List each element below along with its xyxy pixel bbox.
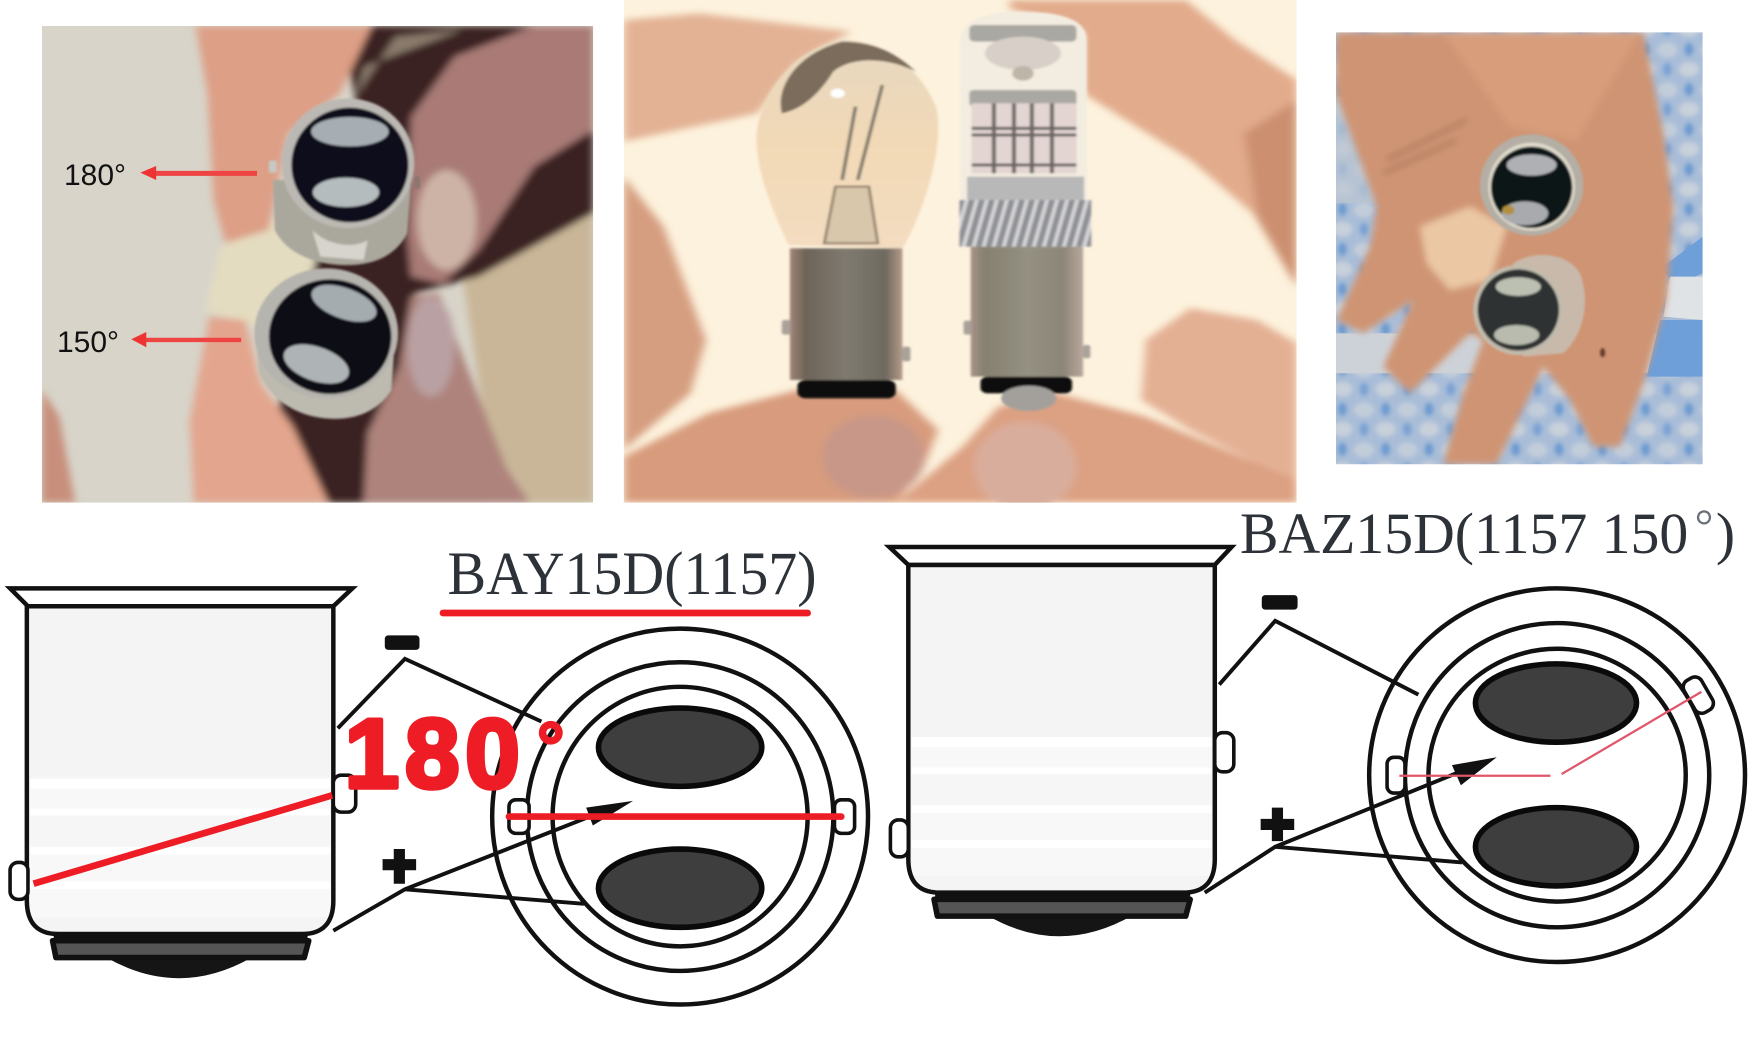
thin red angle lines	[1399, 692, 1701, 776]
diagram: BAY15D 180 degree base	[10, 540, 868, 1005]
red heading underline	[443, 610, 808, 616]
panel: photo comparing 180 and 150 degree bases	[42, 26, 593, 503]
plus symbol and leader lines	[1205, 757, 1497, 893]
heading: BAZ15D(1157 150°): )	[1716, 503, 1735, 566]
minus symbol and leader lines	[338, 635, 541, 728]
bulb side view	[10, 588, 356, 978]
LED bulb	[960, 12, 1091, 411]
panel: photo of incandescent and LED bulbs held in fingers	[624, 0, 1297, 512]
arrow: 180 degree pin	[140, 166, 257, 180]
label: 150 degrees: 150°	[57, 326, 119, 359]
contact end view	[492, 629, 868, 1005]
minus symbol and leader lines	[1219, 595, 1418, 695]
diagram: BAZ15D 150 degree base	[889, 500, 1745, 962]
heading: BAZ15D(1157 150°): °	[1695, 500, 1713, 552]
callout: 180 degrees: °	[537, 708, 570, 786]
heading: BAZ15D(1157 150°): BAZ15D(1157 150	[1240, 503, 1688, 566]
panel: photo of two bulb bases held in a hand	[1330, 27, 1710, 470]
label: 180 degrees: 180°	[64, 159, 126, 192]
red pin angle line: side view	[34, 795, 332, 884]
heading: BAY15D(1157): BAY15D(1157)	[447, 540, 817, 608]
incandescent bulb	[756, 40, 938, 398]
contact end view	[1369, 588, 1745, 962]
plus symbol and leader lines	[333, 801, 633, 931]
arrow: 150 degree pin	[131, 332, 241, 347]
lower contact face	[1472, 264, 1524, 356]
red pin angle line: end view	[509, 814, 841, 820]
callout: 180 degrees: 180	[345, 698, 526, 808]
upper contact face	[1480, 134, 1583, 236]
bulb side view	[889, 547, 1234, 936]
